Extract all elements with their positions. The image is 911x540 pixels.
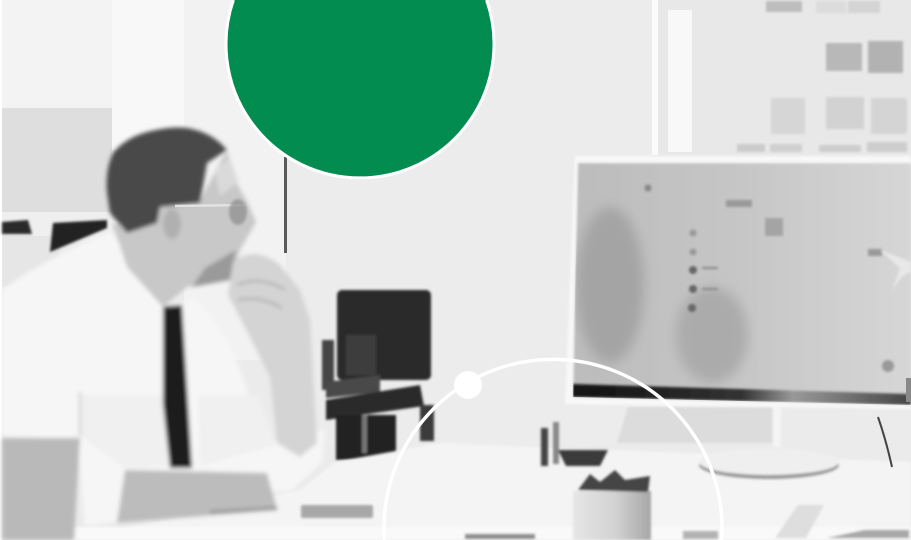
desk items (301, 422, 909, 540)
monitor (565, 156, 911, 479)
man (2, 128, 325, 540)
glasses (175, 205, 245, 206)
tie (163, 305, 192, 468)
face and neck (113, 150, 256, 307)
hand and arm (228, 254, 317, 457)
dark wall edge (284, 157, 287, 253)
forearm on desk (117, 470, 277, 523)
window sill items (2, 220, 107, 252)
ear (163, 209, 181, 239)
near arm (2, 438, 80, 540)
shirt (2, 232, 325, 526)
overlay: green circle (226, 0, 494, 178)
back table with black device (322, 290, 434, 460)
overlay: white ring with dot (384, 359, 722, 540)
desk (70, 443, 911, 540)
sticky notes on whiteboard (737, 1, 907, 152)
hair (107, 128, 227, 233)
wall shadow behind monitor (617, 407, 773, 443)
